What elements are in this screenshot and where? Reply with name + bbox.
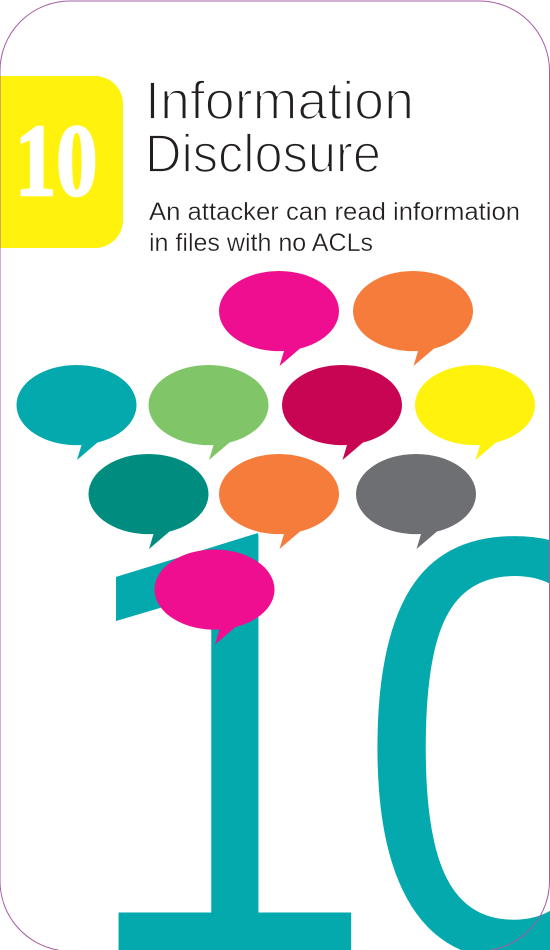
bubble: gray: [356, 454, 476, 549]
description: in files with no ACLs: [149, 229, 373, 257]
bubble: green: [148, 365, 269, 460]
speech bubbles: [16, 271, 535, 644]
bubble: crimson: [282, 365, 402, 460]
bubble: yellow: [415, 365, 535, 460]
bubble: pink bottom: [154, 550, 275, 644]
bubble: dark green: [88, 454, 209, 549]
description: An attacker can read information: [149, 198, 520, 226]
bubble: orange middle: [219, 454, 339, 549]
bubble: orange top: [353, 271, 473, 366]
giant numeral 10: [43, 410, 550, 950]
number badge: [0, 76, 123, 248]
title: Disclosure: [145, 124, 381, 184]
bubble: pink top: [219, 271, 339, 366]
numeral one flag: [116, 533, 258, 621]
badge number: 10: [15, 104, 97, 218]
bubble: teal: [16, 365, 137, 460]
title: Information: [145, 71, 414, 131]
badge background: [0, 76, 123, 248]
